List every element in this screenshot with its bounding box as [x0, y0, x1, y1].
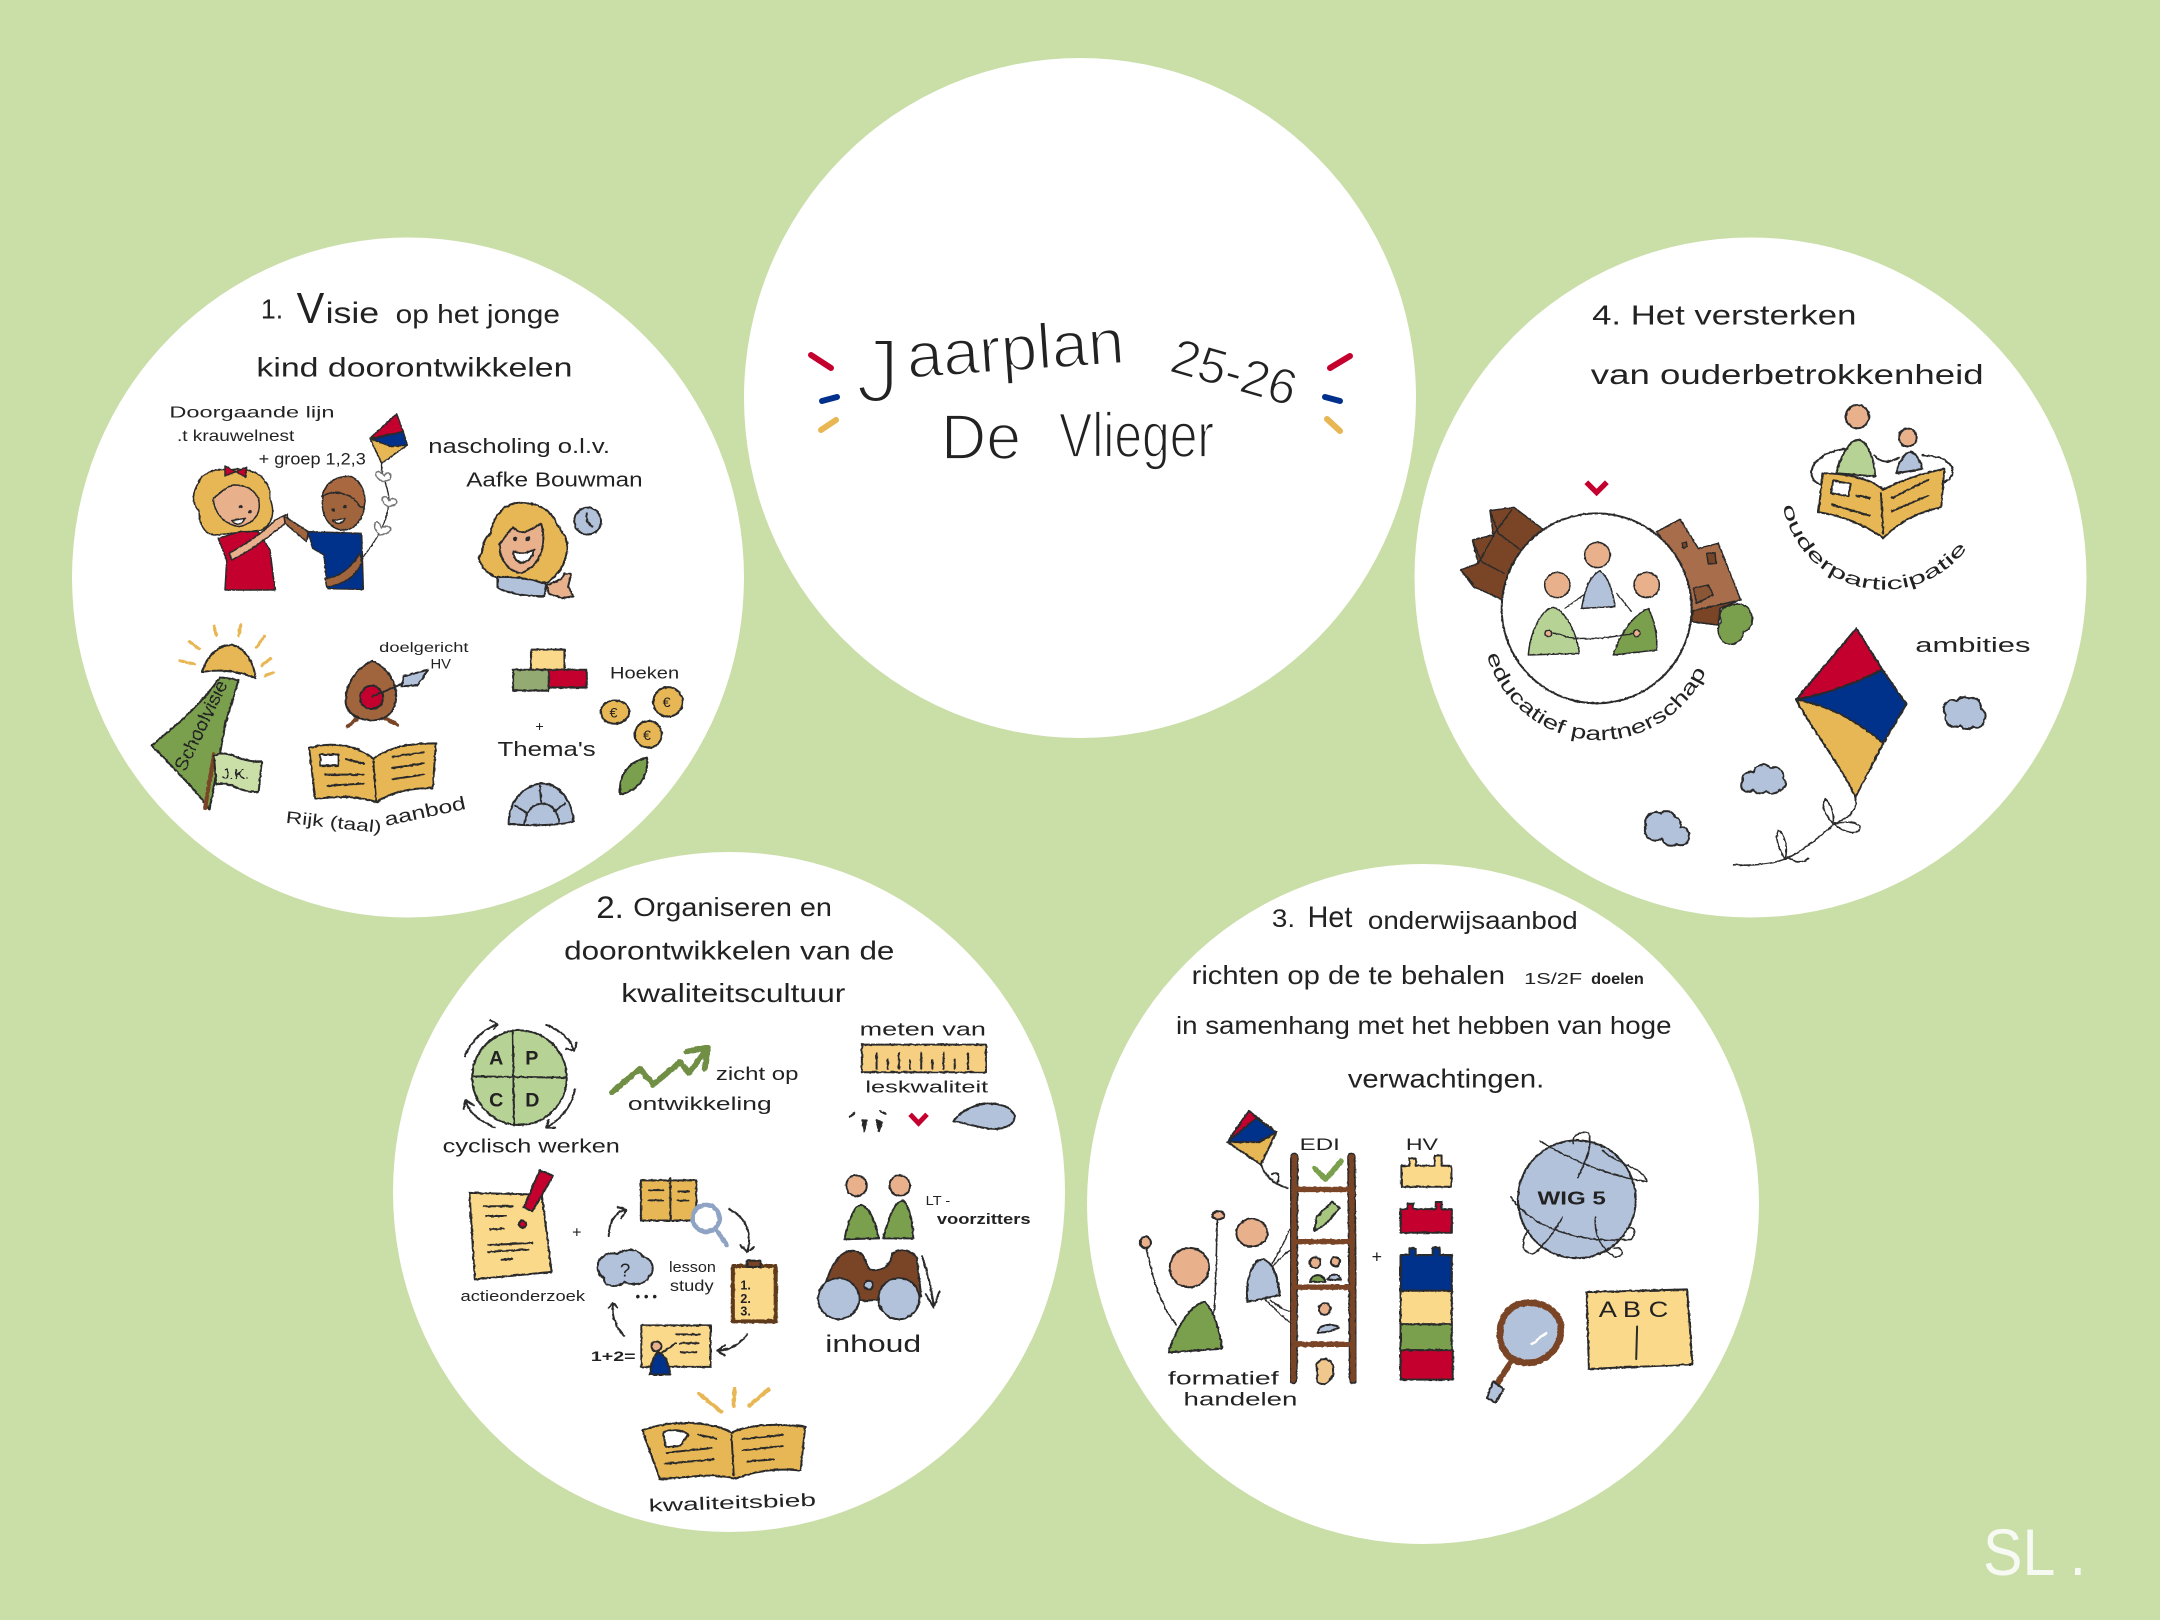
icon: coins, leaf and shell: € [610, 705, 618, 721]
icon: ruler with lesson quality: leskwaliteit [865, 1077, 989, 1096]
heading 3: Het [1308, 901, 1352, 934]
label: hoeken en thema's: Hoeken [610, 664, 679, 683]
label: doorgaande lijn: .t krauwelnest [177, 427, 295, 445]
icon: note with pin [469, 1171, 553, 1279]
label: actieonderzoek: actieonderzoek [461, 1288, 586, 1305]
icon: small kite [1227, 1111, 1288, 1188]
label: zicht op ontwikkeling [628, 1063, 798, 1114]
icon: PDCA cycle: C [489, 1090, 503, 1112]
icon: target with arrow [346, 640, 469, 726]
diagram: lesson study cycle: ? [620, 1259, 630, 1280]
heading 2: doorontwikkelen van de [564, 937, 894, 965]
heading 1: 1. [261, 293, 283, 324]
label: hoeken en thema's: Thema's [497, 738, 596, 761]
icon: target with arrow: HV [431, 656, 451, 671]
title: Jaarplan 25-26 De Vlieger [811, 305, 1350, 473]
heading 2: Organiseren en [633, 894, 832, 922]
label: zicht op ontwikkeling: ontwikkeling [628, 1093, 772, 1114]
title: Jaarplan 25-26 De Vlieger: aarplan [904, 305, 1126, 392]
label: hoeken en thema's: + [535, 719, 544, 735]
heading 1: op het jonge [396, 301, 560, 329]
label: rijk taalaanbod [285, 792, 467, 837]
icon: big kite [1734, 628, 1906, 865]
icon: target with arrow: doelgericht [379, 640, 469, 655]
icon: coins, leaf and shell: € [643, 728, 651, 744]
icon: coins, leaf and shell [509, 687, 683, 825]
title: Jaarplan 25-26 De Vlieger: 25-26 [1165, 328, 1303, 417]
label: doorgaande lijn [169, 403, 366, 468]
diagram: lesson study cycle: lesson [669, 1259, 716, 1276]
icon: LT voorzitters and binoculars [818, 1175, 1031, 1358]
heading 3: richten op de te behalen [1192, 962, 1505, 990]
icon: blocks [513, 650, 587, 691]
heading 1: V [297, 284, 324, 333]
heading 1 [256, 284, 572, 382]
label: kwaliteitsbieb: kwaliteitsbieb [648, 1490, 816, 1516]
heading 3: 1S/2F [1524, 970, 1582, 988]
icon: LT voorzitters and binoculars: inhoud [825, 1331, 921, 1358]
icon: ABC board [1587, 1289, 1692, 1369]
icon: EDI ladder [1293, 1135, 1353, 1384]
icon: EDI ladder: EDI [1300, 1135, 1340, 1154]
label: cyclisch werken: cyclisch werken [443, 1136, 620, 1158]
icon: formatief handelen people: formatief [1168, 1368, 1280, 1389]
icon: PDCA cycle: A [489, 1047, 503, 1069]
heading 3: onderwijsaanbod [1368, 907, 1578, 935]
icon: educatief partnerschap circle [1460, 506, 1754, 742]
diagram: lesson study cycle: 2. [740, 1292, 751, 1306]
heading 1: isie [326, 297, 379, 330]
icon: WIG 5 globe: WIG 5 [1538, 1188, 1606, 1209]
icon: formatief handelen people [1140, 1211, 1297, 1410]
diagram: lesson study cycle: 1. [740, 1279, 751, 1293]
label: rijk taalaanbod: aanbod [382, 792, 467, 830]
icon: PDCA cycle [464, 1021, 577, 1128]
label: doorgaande lijn: Doorgaande lijn [169, 403, 335, 421]
label: actieonderzoek [461, 1223, 586, 1305]
title: Jaarplan 25-26 De Vlieger: Vlieger [1059, 401, 1214, 471]
icon: children holding hands with kite [193, 414, 407, 590]
label: hoeken en thema's [497, 664, 679, 761]
heading 4: van ouderbetrokkenheid [1591, 359, 1984, 390]
label: actieonderzoek: + [572, 1223, 582, 1241]
icon: sun and school vision flag: Schoolvisie [170, 677, 232, 774]
heading 2: kwaliteitscultuur [621, 980, 846, 1008]
icon: HV block tower [1372, 1135, 1453, 1380]
icon: ouderparticipatie: ouderparticipatie [1784, 506, 1965, 590]
label: nascholing: Aafke Bouwman [466, 469, 643, 492]
diagram: lesson study cycle: 3. [740, 1305, 751, 1319]
icon: open book [309, 743, 436, 802]
panel: 4 ouderbetrokkenheid [1414, 238, 2086, 918]
icon: WIG 5 globe [1511, 1132, 1647, 1258]
label: nascholing: nascholing o.l.v. [428, 435, 610, 458]
heading 2: 2. [596, 890, 624, 925]
icon: LT voorzitters and binoculars: LT - [926, 1194, 950, 1208]
label: rijk taalaanbod: Rijk (taal) [285, 808, 382, 837]
heading 1: kind doorontwikkelen [256, 352, 572, 382]
icon: clouds [1645, 697, 1986, 846]
diagram: lesson study cycle [591, 1178, 776, 1375]
icon: teacher with clock [479, 503, 601, 598]
icon: ABC board: A B C [1599, 1297, 1668, 1322]
label: doorgaande lijn: + groep 1,2,3 [259, 449, 366, 468]
heading 3: doelen [1591, 970, 1644, 988]
panel: title circle [744, 58, 1416, 738]
icon: ruler with lesson quality: meten van [860, 1018, 986, 1039]
icon: LT voorzitters and binoculars: voorzitters [937, 1211, 1031, 1228]
heading 2 [564, 890, 894, 1008]
icon: heart [1586, 482, 1607, 492]
panel: 3 onderwijsaanbod [1087, 864, 1759, 1544]
icon: quality library book [642, 1389, 805, 1479]
diagram: lesson study cycle: 1+2= [591, 1349, 636, 1365]
heading 3: 3. [1272, 905, 1295, 933]
icon: PDCA cycle: P [525, 1047, 538, 1069]
title: Jaarplan 25-26 De Vlieger: De [941, 401, 1021, 473]
title: Jaarplan 25-26 De Vlieger: J [856, 320, 900, 422]
panel: 2 kwaliteitscultuur [393, 852, 1065, 1532]
panel: 1 Visie op het jonge kind [72, 238, 744, 918]
label: nascholing [428, 435, 643, 492]
label: zicht op ontwikkeling: zicht op [716, 1063, 798, 1084]
heading 3: verwachtingen. [1348, 1066, 1544, 1094]
icon: sun and school vision flag [152, 625, 273, 809]
heading 4 [1591, 300, 1984, 390]
icon: HV block tower: + [1372, 1247, 1382, 1267]
icon: sun and school vision flag: J.K. [222, 766, 249, 783]
diagram: lesson study cycle: study [670, 1277, 714, 1295]
icon: PDCA cycle: D [525, 1090, 539, 1112]
icon: ruler with lesson quality [850, 1018, 1014, 1131]
icon: coins, leaf and shell: € [663, 695, 671, 711]
icon: ouderparticipatie [1784, 404, 1965, 590]
decorative coloured dashes [811, 355, 1350, 431]
heading 3: in samenhang met het hebben van hoge [1176, 1012, 1671, 1040]
label: ambities: ambities [1915, 634, 2030, 657]
icon: HV block tower: HV [1406, 1135, 1439, 1154]
icon: formatief handelen people: handelen [1184, 1389, 1297, 1410]
diagram: lesson study cycle: • • • [636, 1289, 657, 1304]
heading 4: 4. Het versterken [1592, 300, 1856, 331]
signature SL: SL . [1983, 1515, 2086, 1589]
icon: magnifying glass [1487, 1303, 1561, 1402]
icon: green rising arrow [612, 1047, 708, 1092]
icon: educatief partnerschap circle: educatief partnerschap [1488, 654, 1704, 742]
heading 3 [1176, 901, 1671, 1094]
